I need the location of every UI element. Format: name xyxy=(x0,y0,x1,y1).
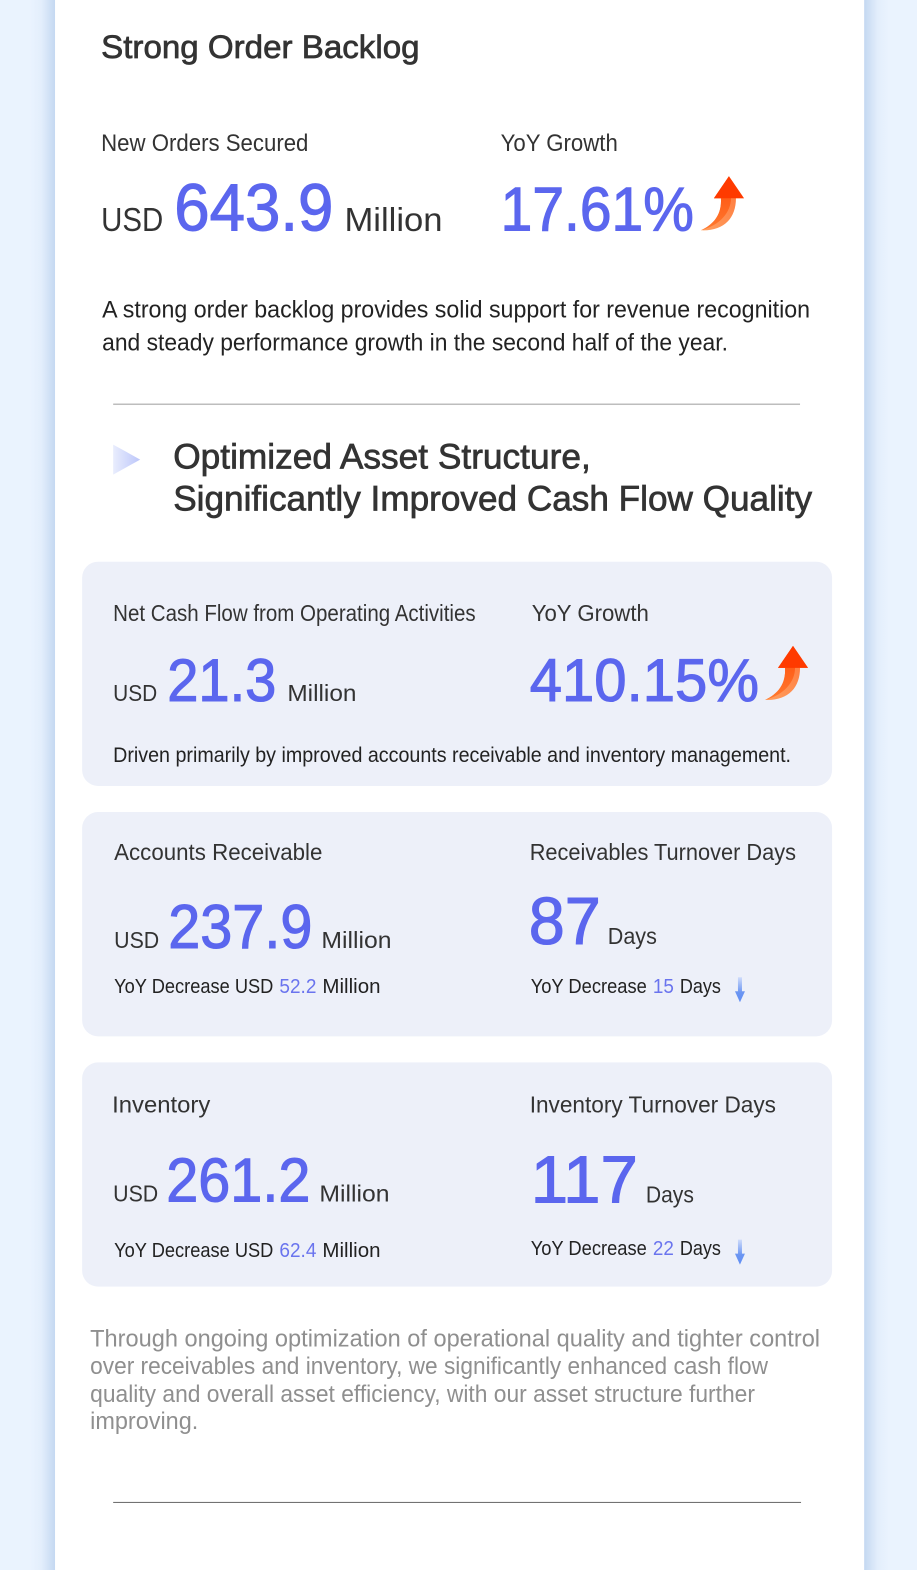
note: inventory days decrease xyxy=(531,1238,721,1260)
note: receivable decrease: 52.2 xyxy=(279,976,316,998)
metric: inventory turnover days xyxy=(530,1091,776,1218)
note: inventory days decrease: Days xyxy=(680,1238,721,1260)
note: turnover days decrease xyxy=(531,976,721,998)
metric: cash flow yoy growth xyxy=(530,600,759,714)
note: inventory decrease: Million xyxy=(322,1240,381,1262)
metric: receivables turnover days: Receivables Turnover Days xyxy=(530,839,796,865)
metric: receivables turnover days: Days xyxy=(608,923,657,949)
metric: order yoy growth: 17.61% xyxy=(501,175,694,244)
panel: inventory xyxy=(82,1062,832,1287)
note: receivable decrease xyxy=(114,976,381,998)
metric: new orders secured: Million xyxy=(344,202,443,239)
paragraph: closing summary: improving. xyxy=(90,1408,198,1435)
paragraph: backlog summary: and steady performance growth in the second half of the year. xyxy=(102,329,728,356)
section: strong order backlog xyxy=(101,29,810,356)
metric: inventory turnover days: Inventory Turnover Days xyxy=(530,1091,776,1117)
heading: optimized asset structure: Optimized Asset Structure, xyxy=(173,438,591,477)
heading: optimized asset structure xyxy=(173,438,813,519)
metric: cash flow yoy growth: YoY Growth xyxy=(532,600,649,626)
metric: inventory: USD xyxy=(113,1181,158,1207)
paragraph: closing summary: quality and overall asset efficiency, with our asset structure further xyxy=(90,1381,755,1408)
metric: inventory xyxy=(112,1091,390,1216)
metric: new orders secured xyxy=(101,130,443,245)
note: turnover days decrease: YoY Decrease xyxy=(531,976,647,998)
metric: receivables turnover days: 87 xyxy=(529,884,601,959)
metric: order yoy growth xyxy=(501,130,694,244)
paragraph: backlog summary: A strong order backlog provides solid support for revenue recognition xyxy=(102,296,810,323)
metric: inventory turnover days: 117 xyxy=(531,1143,638,1218)
metric: net cash flow from operating activities: 21.3 xyxy=(167,647,276,714)
metric: new orders secured: 643.9 xyxy=(174,170,333,245)
metric: inventory: 261.2 xyxy=(166,1147,310,1216)
note: receivable decrease: Million xyxy=(322,976,381,998)
panel: net cash flow xyxy=(82,562,832,786)
panel: accounts receivable xyxy=(82,812,832,1036)
note: inventory decrease xyxy=(114,1240,381,1262)
icon: orange up arrow xyxy=(765,646,808,700)
metric: inventory: Million xyxy=(319,1181,390,1207)
paragraph: backlog summary xyxy=(102,296,810,356)
paragraph: closing summary: over receivables and inventory, we significantly enhanced cash flow xyxy=(90,1353,769,1380)
heading: optimized asset structure: Significantly Improved Cash Flow Quality xyxy=(173,480,813,519)
paragraph: closing summary xyxy=(90,1326,820,1435)
heading: strong order backlog: Strong Order Backlog xyxy=(101,29,420,65)
metric: accounts receivable: Accounts Receivable xyxy=(114,839,322,865)
metric: net cash flow from operating activities: USD xyxy=(113,680,157,706)
metric: accounts receivable: Million xyxy=(321,927,392,953)
metric: accounts receivable: USD xyxy=(114,927,159,953)
note: cash flow driver: Driven primarily by improved accounts receivable and inventory management. xyxy=(113,744,791,767)
metric: new orders secured: New Orders Secured xyxy=(101,130,308,157)
note: inventory days decrease: YoY Decrease xyxy=(531,1238,647,1260)
note: turnover days decrease: Days xyxy=(680,976,721,998)
note: inventory days decrease: 22 xyxy=(653,1238,674,1260)
note: turnover days decrease: 15 xyxy=(653,976,674,998)
icon: blue down arrow xyxy=(735,977,745,1002)
icon: blue down arrow xyxy=(735,1240,745,1265)
metric: accounts receivable: 237.9 xyxy=(168,893,312,962)
note: receivable decrease: YoY Decrease USD xyxy=(114,976,273,998)
note: inventory decrease: YoY Decrease USD xyxy=(114,1240,273,1262)
metric: receivables turnover days xyxy=(529,839,796,959)
icon: orange up arrow xyxy=(701,176,744,230)
paragraph: closing summary: Through ongoing optimization of operational quality and tighter control xyxy=(90,1326,820,1353)
metric: new orders secured: USD xyxy=(101,202,163,239)
note: inventory decrease: 62.4 xyxy=(279,1240,316,1262)
metric: net cash flow from operating activities: Net Cash Flow from Operating Activities xyxy=(113,600,476,626)
metric: order yoy growth: YoY Growth xyxy=(501,130,618,157)
metric: accounts receivable xyxy=(114,839,392,962)
icon: section triangle xyxy=(113,445,140,475)
metric: net cash flow from operating activities xyxy=(113,600,476,714)
metric: net cash flow from operating activities: Million xyxy=(287,680,356,706)
metric: inventory turnover days: Days xyxy=(646,1182,694,1208)
metric: cash flow yoy growth: 410.15% xyxy=(530,647,759,714)
metric: inventory: Inventory xyxy=(112,1091,211,1117)
